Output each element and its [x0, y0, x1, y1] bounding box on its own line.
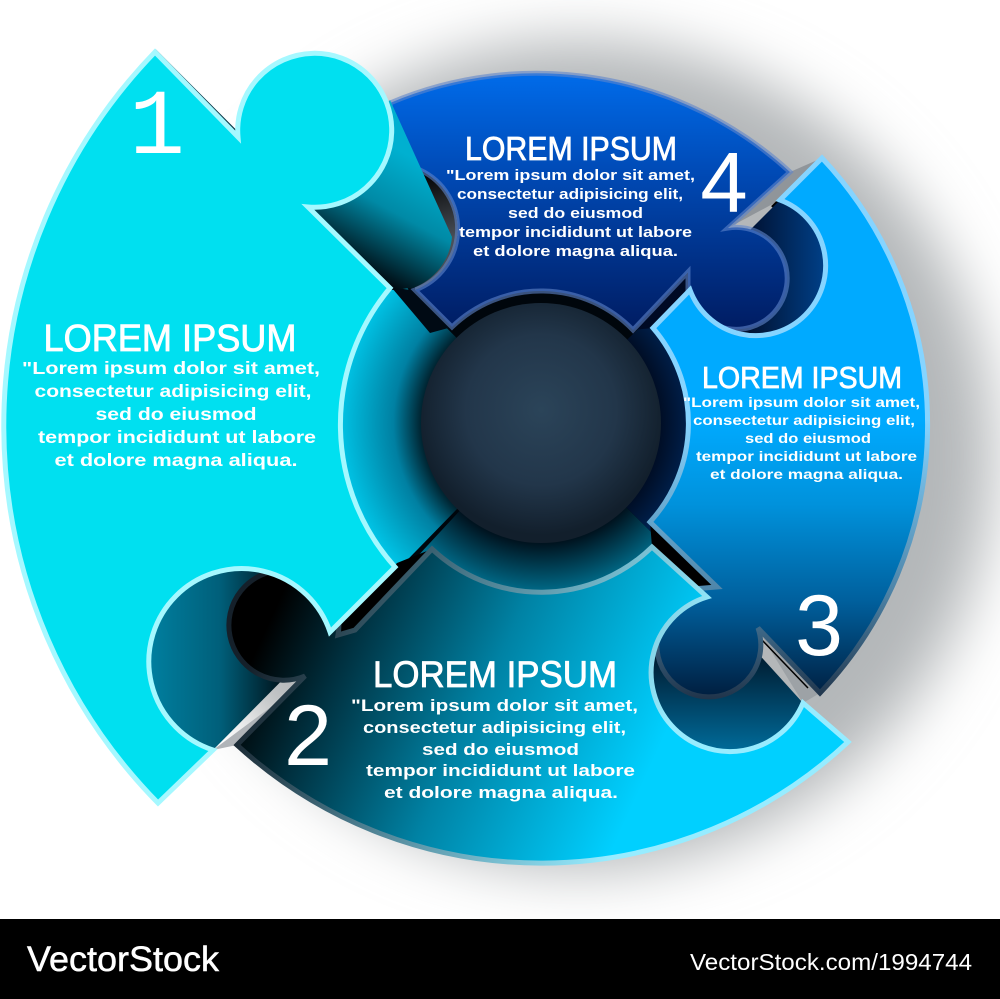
piece 3	[650, 158, 928, 697]
heading 2: LOREM IPSUM	[373, 654, 617, 695]
body 3: tempor incididunt ut labore	[696, 449, 917, 464]
number 1: 1	[129, 76, 185, 181]
footer url: VectorStock.com/1994744	[690, 949, 972, 975]
background shadow	[163, 40, 993, 870]
body 3	[683, 395, 920, 482]
socket in piece 2	[651, 597, 803, 752]
body 1: et dolore magna aliqua.	[54, 450, 298, 470]
heading 1: LOREM IPSUM	[44, 318, 296, 360]
center ball	[421, 303, 661, 543]
body 1: tempor incididunt ut labore	[38, 427, 316, 447]
heading 3: LOREM IPSUM	[702, 360, 902, 395]
body 1: consectetur adipisicing elit,	[34, 381, 312, 401]
body 3: et dolore magna aliqua.	[710, 467, 903, 482]
panel text 1	[22, 76, 320, 470]
body 4: et dolore magna aliqua.	[473, 244, 678, 260]
body 3: "Lorem ipsum dolor sit amet,	[683, 395, 920, 410]
gap shadows between pieces	[155, 50, 822, 750]
body 1: sed do eiusmod	[96, 404, 256, 424]
body 2: tempor incididunt ut labore	[366, 762, 635, 780]
socket in piece 3	[690, 200, 826, 336]
number 2: 2	[284, 688, 332, 784]
body 4: tempor incididunt ut labore	[459, 225, 692, 241]
number 4: 4	[700, 136, 748, 231]
body 2: sed do eiusmod	[422, 741, 579, 759]
piece 2	[229, 547, 848, 863]
body 1: "Lorem ipsum dolor sit amet,	[22, 358, 320, 378]
body 4	[446, 168, 695, 260]
body 4: "Lorem ipsum dolor sit amet,	[446, 168, 695, 184]
number 3: 3	[795, 578, 843, 674]
piece 1	[4, 52, 395, 803]
piece 4	[390, 73, 790, 330]
body 2	[351, 697, 638, 802]
socket in piece 1	[149, 569, 330, 750]
panel text 4	[446, 130, 748, 260]
body 1	[22, 358, 320, 470]
shadow tube of piece 1 knob	[310, 100, 452, 290]
body 3: sed do eiusmod	[745, 431, 871, 446]
panel text 2	[284, 654, 638, 802]
body 3: consectetur adipisicing elit,	[693, 413, 915, 428]
body 4: consectetur adipisicing elit,	[457, 187, 683, 203]
body 2: "Lorem ipsum dolor sit amet,	[351, 697, 638, 715]
footer logo: VectorStock	[27, 940, 220, 979]
center hole	[290, 170, 746, 680]
heading 4: LOREM IPSUM	[465, 130, 677, 167]
body 4: sed do eiusmod	[508, 206, 643, 222]
footer bar	[0, 919, 1000, 999]
socket in piece 4	[415, 170, 458, 290]
panel text 3	[683, 360, 920, 674]
body 2: consectetur adipisicing elit,	[363, 719, 626, 737]
body 2: et dolore magna aliqua.	[384, 784, 618, 802]
